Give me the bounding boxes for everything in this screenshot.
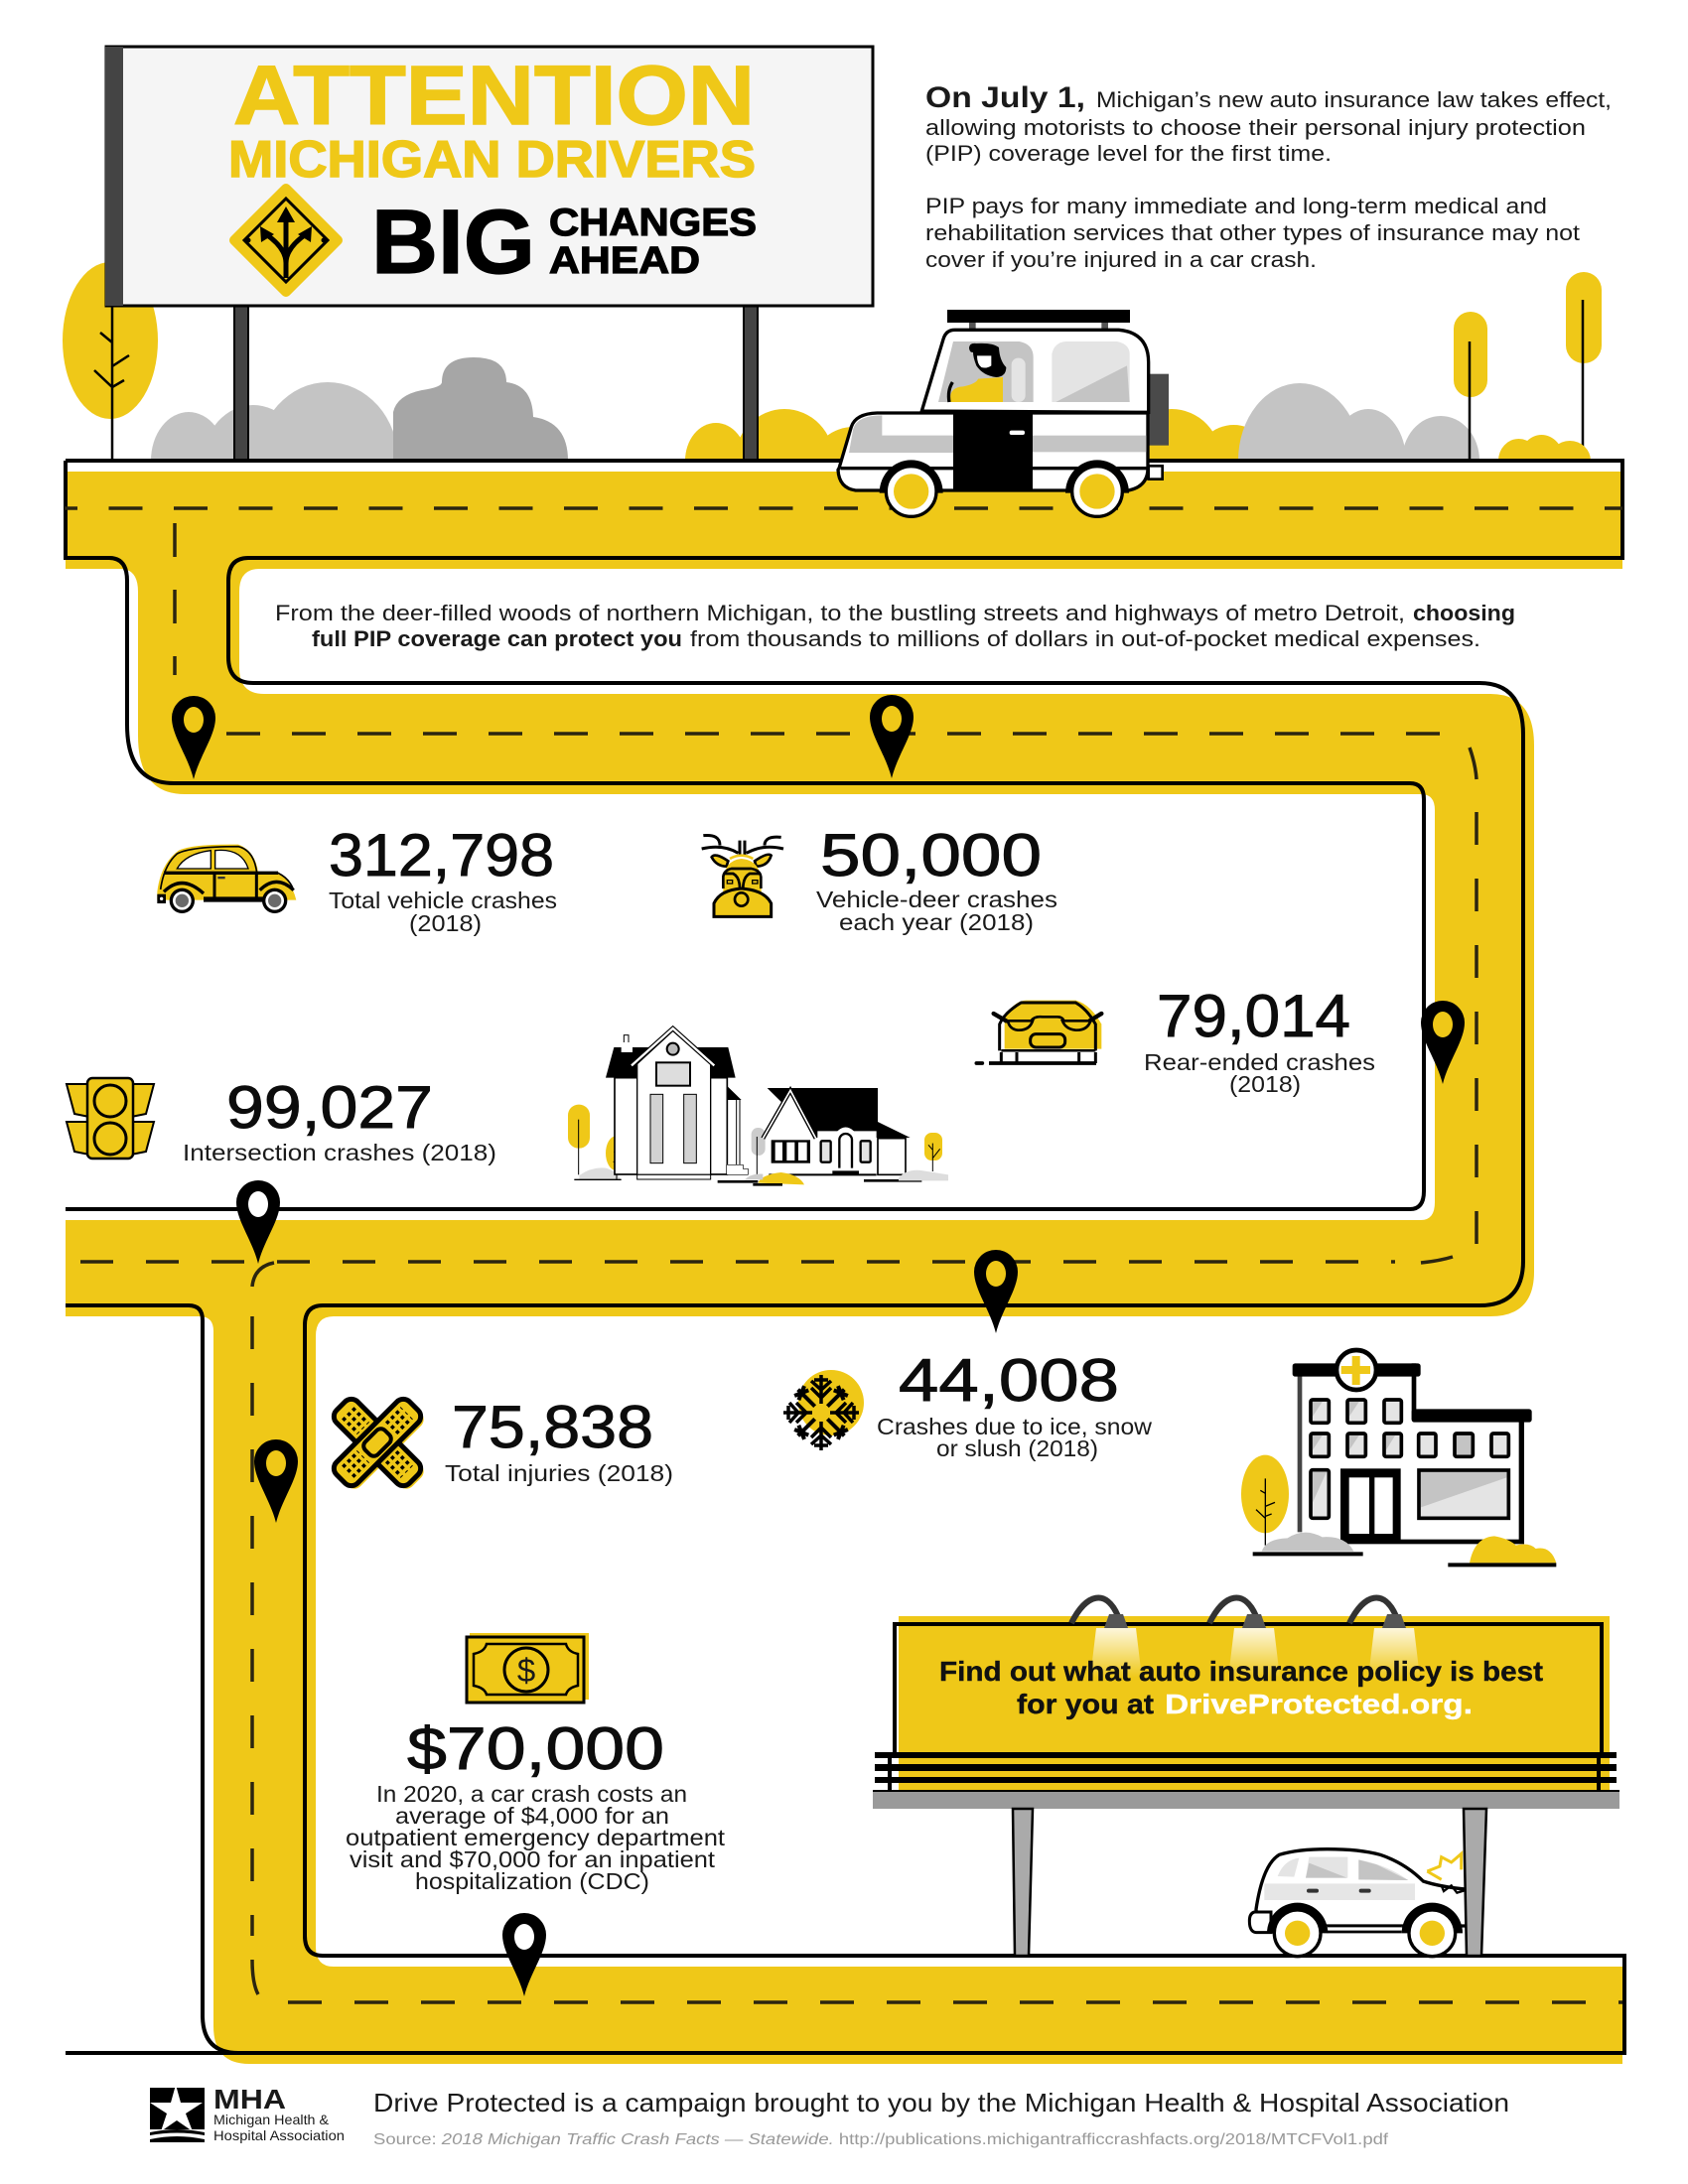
footer: mha logo: Hospital Association	[213, 2127, 345, 2143]
stat: vehicle-deer crashes: Vehicle-deer crashes	[816, 887, 1057, 912]
icon: road sign with arrows	[234, 189, 338, 292]
stat: crashes due to ice: Crashes due to ice, snow	[877, 1414, 1152, 1439]
stat: 70,000 hospitalization cost: outpatient emergency department	[346, 1825, 726, 1850]
stat: rear-ended crashes: 79,014	[1157, 983, 1350, 1049]
intro text: on july 1: On July 1,	[925, 81, 1085, 114]
billboard post: right leg	[1464, 1809, 1486, 1956]
icon: map pin 7	[502, 1913, 546, 1996]
intro text: on july 1: cover if you’re injured in a car crash.	[925, 247, 1317, 272]
stat: intersection crashes: Intersection crashes (2018)	[183, 1140, 496, 1165]
stat: crashes due to ice: or slush (2018)	[936, 1435, 1098, 1461]
billboard: attention michigan drivers: MICHIGAN DRIVERS	[228, 131, 756, 189]
billboard: find out what auto insurance policy is best	[873, 1598, 1619, 1956]
icon: traffic light	[67, 1078, 154, 1159]
icon: rear-ended car	[976, 1001, 1101, 1063]
icon: map pin 3	[1421, 1001, 1465, 1084]
road: winding yellow highway	[51, 461, 1659, 2064]
stat: total injuries: Total injuries (2018)	[445, 1460, 673, 1486]
icon: map pin 2	[870, 695, 914, 778]
vehicle: car with driver on top road	[838, 310, 1169, 516]
footer: mha logo	[150, 2084, 345, 2143]
stat: 70,000 hospitalization cost: $70,000	[407, 1715, 664, 1782]
icon: deer	[702, 835, 783, 916]
stat: total vehicle crashes: (2018)	[409, 910, 482, 936]
icon: yellow car	[157, 845, 296, 913]
billboard: find out what auto insurance policy is best: Find out what auto insurance policy is best	[939, 1656, 1543, 1687]
billboard: find out what auto insurance policy is best: for you at	[1017, 1689, 1154, 1719]
intro text: on july 1: PIP pays for many immediate and long-term medical and	[925, 194, 1547, 218]
stat: rear-ended crashes	[976, 983, 1375, 1097]
billboard: attention michigan drivers: CHANGES	[549, 202, 757, 244]
stat: total vehicle crashes: Total vehicle crashes	[329, 887, 557, 913]
footer: source line: Source: 2018 Michigan Traffic Crash Facts — Statewide. http://publications.michigantrafficcrashfacts.org/2018/MTCFVol1.pdf	[373, 2131, 1389, 2148]
text block: full pip coverage: choosing	[1413, 601, 1515, 625]
text block: full pip coverage: full PIP coverage can protect you	[312, 626, 682, 651]
text block: full pip coverage	[275, 601, 1515, 651]
icon: map pin 6	[254, 1439, 298, 1523]
billboard: attention michigan drivers: BIG	[371, 192, 535, 293]
illustration: houses	[568, 1028, 948, 1184]
stat: rear-ended crashes: Rear-ended crashes	[1144, 1049, 1375, 1075]
stat: vehicle-deer crashes: each year (2018)	[839, 909, 1034, 935]
billboard: find out what auto insurance policy is best: DriveProtected.org.	[1165, 1689, 1473, 1719]
icon: snowflake	[783, 1370, 864, 1450]
stat: total injuries	[331, 1394, 673, 1492]
stat: 70,000 hospitalization cost: visit and $70,000 for an inpatient	[350, 1846, 716, 1872]
stat: total vehicle crashes: 312,798	[329, 822, 554, 888]
intro text: on july 1: (PIP) coverage level for the first time.	[925, 141, 1332, 166]
icon: billboard lamps	[1071, 1598, 1420, 1678]
billboard: attention michigan drivers: ATTENTION	[233, 49, 755, 142]
icon: dollar bill	[467, 1633, 589, 1703]
vehicle: crashed car	[1249, 1849, 1468, 1957]
stat: rear-ended crashes: (2018)	[1229, 1071, 1301, 1097]
icon: map pin 4	[236, 1180, 280, 1264]
intro text: on july 1: rehabilitation services that other types of insurance may not	[925, 220, 1580, 245]
intro text: on july 1: allowing motorists to choose their personal injury protection	[925, 115, 1586, 140]
icon: crossed bandages	[331, 1396, 427, 1492]
stat: total injuries: 75,838	[452, 1394, 653, 1460]
illustration: hospital	[1241, 1350, 1556, 1565]
stat: 70,000 hospitalization cost: average of $4,000 for an	[395, 1803, 669, 1829]
text block: full pip coverage: From the deer-filled woods of northern Michigan, to the bustling streets and highways of metro Detroit,	[275, 601, 1405, 625]
stat: 70,000 hospitalization cost	[346, 1633, 726, 1894]
intro text: on july 1: Michigan’s new auto insurance law takes effect,	[1096, 87, 1612, 112]
icon: map pin 1	[172, 696, 215, 779]
stat: vehicle-deer crashes	[702, 822, 1057, 935]
stat: total vehicle crashes	[157, 822, 557, 936]
stat: crashes due to ice	[783, 1347, 1152, 1461]
billboard: attention michigan drivers: AHEAD	[549, 240, 700, 282]
text block: full pip coverage: from thousands to millions of dollars in out-of-pocket medical expenses.	[690, 626, 1480, 651]
stat: crashes due to ice: 44,008	[899, 1347, 1119, 1414]
billboard: attention michigan drivers	[105, 47, 873, 461]
icon: map pin 5	[974, 1250, 1018, 1333]
footer: mha logo: Michigan Health &	[213, 2112, 330, 2127]
footer: campaign credit: Drive Protected is a campaign brought to you by the Michigan Health & Hospital Association	[373, 2088, 1509, 2117]
stat: 70,000 hospitalization cost: hospitalization (CDC)	[415, 1868, 649, 1894]
footer: mha logo: MHA	[213, 2084, 286, 2115]
stat: intersection crashes: 99,027	[226, 1074, 433, 1141]
stat: vehicle-deer crashes: 50,000	[820, 822, 1042, 888]
icon: dollar bill: $	[517, 1652, 535, 1689]
stat: intersection crashes	[67, 1074, 496, 1165]
stat: 70,000 hospitalization cost: In 2020, a car crash costs an	[376, 1781, 687, 1807]
scenery: trees and bushes behind the road	[63, 262, 1602, 461]
intro text: on july 1	[925, 81, 1612, 272]
